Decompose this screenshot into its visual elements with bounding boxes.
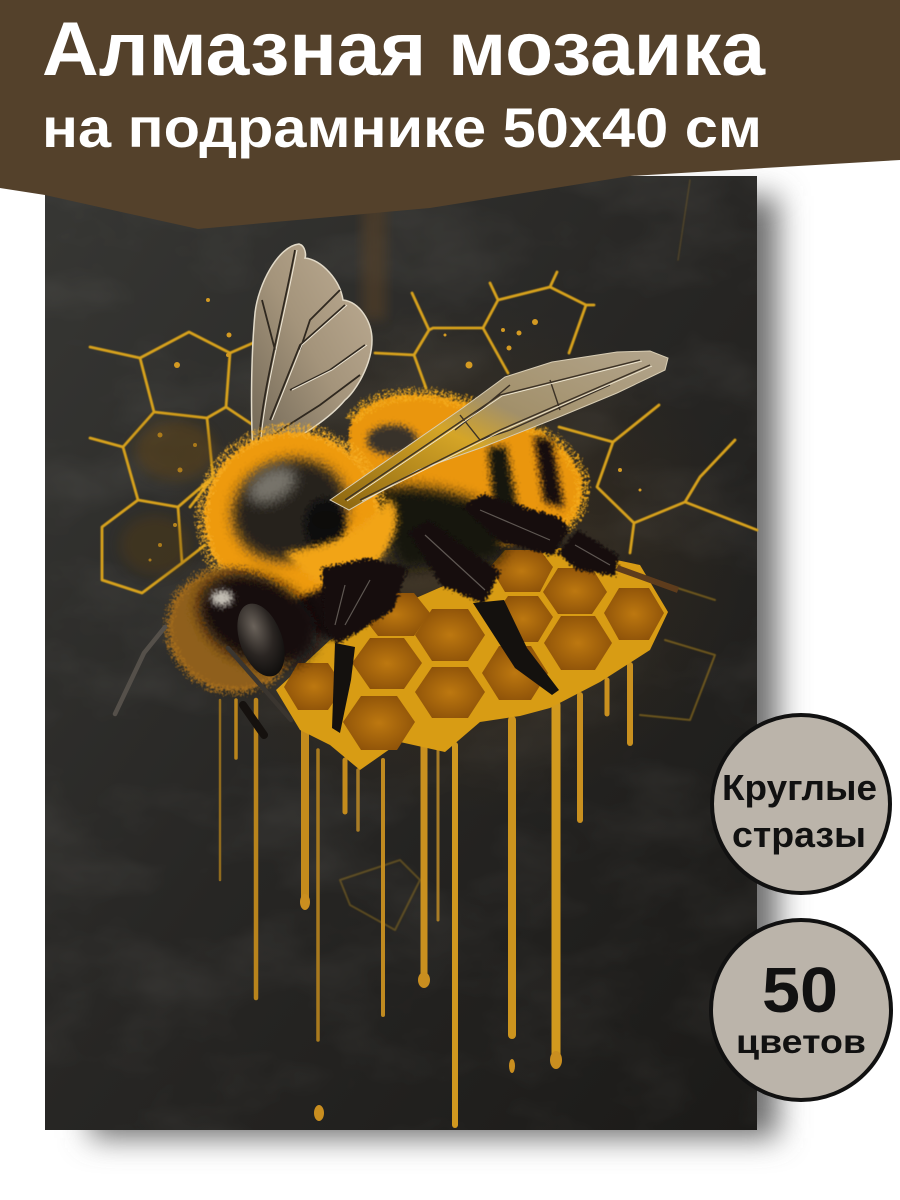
eye xyxy=(228,597,294,683)
abdomen xyxy=(349,394,583,570)
canvas background xyxy=(45,176,757,1130)
legs xyxy=(322,494,678,733)
honey droplets xyxy=(300,894,562,1121)
bee xyxy=(115,244,678,735)
antennae and mouth parts xyxy=(115,627,291,735)
wing base xyxy=(312,511,340,529)
badge: round rhinestones: Круглые xyxy=(722,767,877,808)
back wing xyxy=(252,244,372,457)
honeycomb line pattern xyxy=(90,180,757,930)
front wing xyxy=(330,351,668,510)
honeycomb piece xyxy=(276,548,668,770)
title line 1: Алмазная мозаика xyxy=(42,7,766,92)
honey drips xyxy=(220,665,630,1125)
badge: 50 colours xyxy=(711,920,891,1100)
header banner xyxy=(0,0,900,229)
gold splatter xyxy=(148,298,642,562)
thorax xyxy=(202,430,400,640)
title line 2: на подрамнике 50х40 см xyxy=(42,96,762,159)
badge: 50 colours: 50 xyxy=(762,954,838,1026)
canvas artwork xyxy=(45,176,757,1130)
badge: round rhinestones: стразы xyxy=(732,814,866,855)
canvas shadow xyxy=(90,196,778,1138)
badge: 50 colours: цветов xyxy=(736,1023,866,1060)
head xyxy=(149,549,332,711)
title xyxy=(42,7,766,159)
badge: round rhinestones xyxy=(712,715,890,893)
